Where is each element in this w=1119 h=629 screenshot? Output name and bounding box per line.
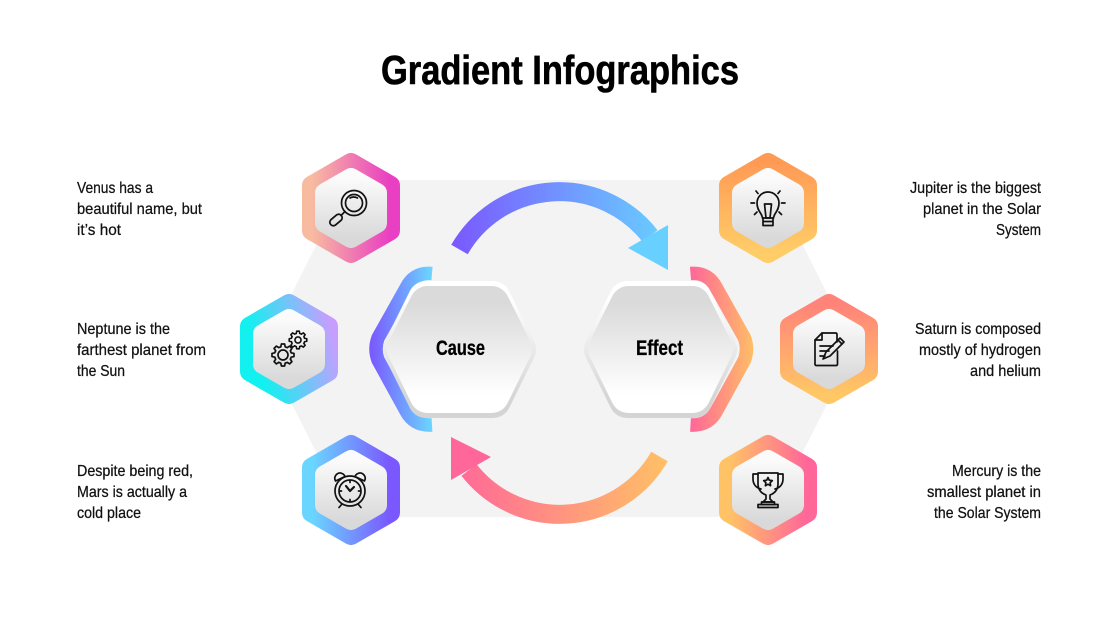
text: Mercury: smallest planet in bbox=[927, 484, 1041, 501]
text: Venus: beautiful name, but bbox=[77, 201, 203, 218]
arrow: effect to cause bbox=[451, 437, 660, 514]
text: Venus: Venus has a bbox=[77, 180, 153, 197]
text: Saturn: and helium bbox=[970, 363, 1041, 380]
text: Mercury: the Solar System bbox=[934, 505, 1041, 522]
title: Gradient Infographics bbox=[381, 47, 739, 93]
text: Jupiter: Jupiter is the biggest bbox=[910, 180, 1041, 197]
background hexagon panel bbox=[268, 180, 850, 517]
icon: alarm clock bbox=[335, 473, 365, 508]
text: Mars bbox=[77, 463, 193, 522]
text: Neptune: Neptune is the bbox=[77, 321, 170, 338]
hexagon: search bbox=[312, 163, 390, 253]
text: Jupiter: System bbox=[996, 222, 1041, 239]
text: Jupiter bbox=[910, 180, 1042, 239]
text: Jupiter: planet in the Solar bbox=[923, 201, 1042, 218]
text: Venus: it’s hot bbox=[77, 222, 122, 239]
hexagon: document and pencil bbox=[790, 304, 868, 394]
effect label: Effect bbox=[636, 337, 683, 360]
cause bracket bbox=[376, 273, 432, 425]
text: Saturn bbox=[915, 321, 1041, 380]
icon: magnifying glass bbox=[328, 190, 366, 227]
icon: light bulb bbox=[751, 191, 785, 226]
text: Mars: Mars is actually a bbox=[77, 484, 187, 501]
icon: document and pencil bbox=[815, 333, 844, 366]
effect bracket bbox=[690, 273, 746, 425]
cause hexagon bbox=[401, 299, 518, 400]
text: Neptune: farthest planet from bbox=[77, 342, 206, 359]
text: Saturn: mostly of hydrogen bbox=[919, 342, 1041, 359]
text: Mercury bbox=[927, 463, 1041, 522]
icon: trophy bbox=[753, 473, 783, 508]
hexagon: gears bbox=[250, 304, 328, 394]
cause label: Cause bbox=[436, 337, 485, 360]
arrow: cause to effect bbox=[460, 192, 668, 270]
hexagon: trophy bbox=[729, 445, 807, 535]
text: Mars: cold place bbox=[77, 505, 141, 522]
text: Neptune bbox=[77, 321, 206, 380]
text: Mercury: Mercury is the bbox=[952, 463, 1041, 480]
text: Saturn: Saturn is composed bbox=[915, 321, 1041, 338]
hexagon: alarm clock bbox=[312, 445, 390, 535]
text: Mars: Despite being red, bbox=[77, 463, 193, 480]
effect hexagon bbox=[602, 299, 719, 400]
icon: gears bbox=[272, 331, 307, 366]
hexagon: light bulb bbox=[729, 163, 807, 253]
text: Venus bbox=[77, 180, 203, 239]
text: Neptune: the Sun bbox=[77, 363, 125, 380]
